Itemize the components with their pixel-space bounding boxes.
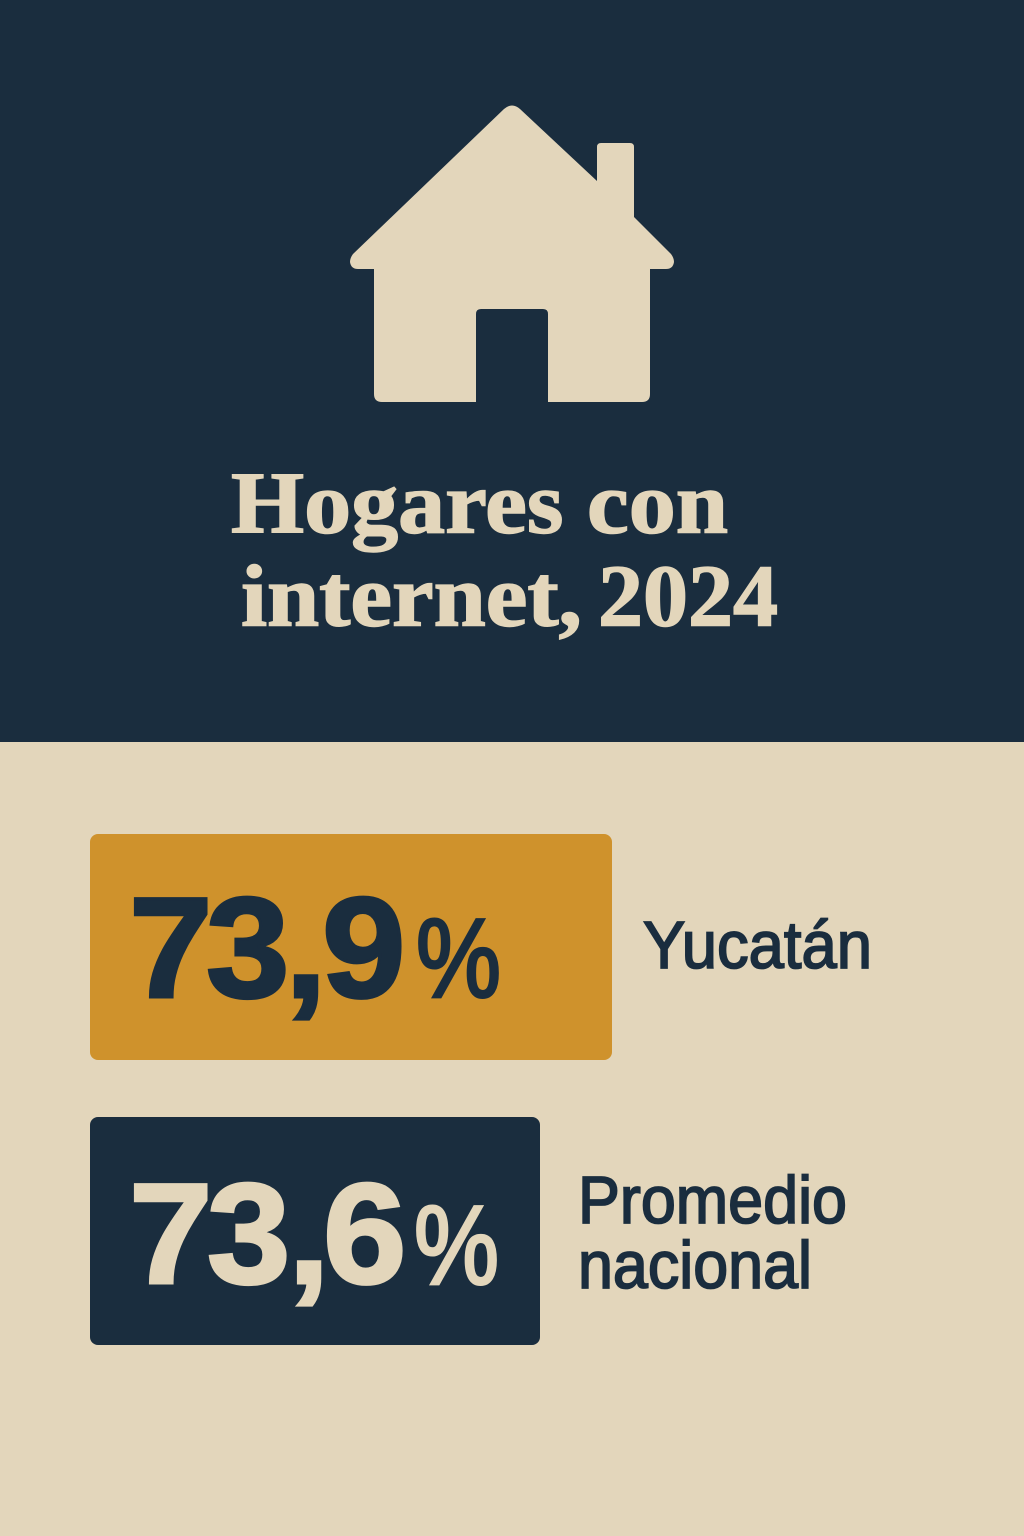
label: Yucatán: Yucatán [643, 908, 872, 983]
panel: national average value [90, 1117, 540, 1345]
panel: Yucatán value: % [416, 896, 501, 1021]
panel: Yucatán value: 73,9 [129, 868, 406, 1028]
panel: Yucatán value [90, 834, 612, 1060]
title: 2024 [598, 548, 778, 646]
panel: national average value: 73,6 [129, 1154, 406, 1314]
panel: cream lower background [0, 742, 1024, 1536]
panel: national average value: % [414, 1183, 499, 1308]
label: Promedio nacional [578, 1163, 847, 1303]
title: internet, [241, 548, 582, 646]
title [231, 456, 778, 646]
icon: house [350, 106, 674, 402]
label: Promedio nacional: Promedio [578, 1163, 847, 1238]
panel: navy header [0, 0, 1024, 742]
title: Hogares con [231, 456, 728, 552]
label: Promedio nacional: nacional [578, 1228, 812, 1303]
